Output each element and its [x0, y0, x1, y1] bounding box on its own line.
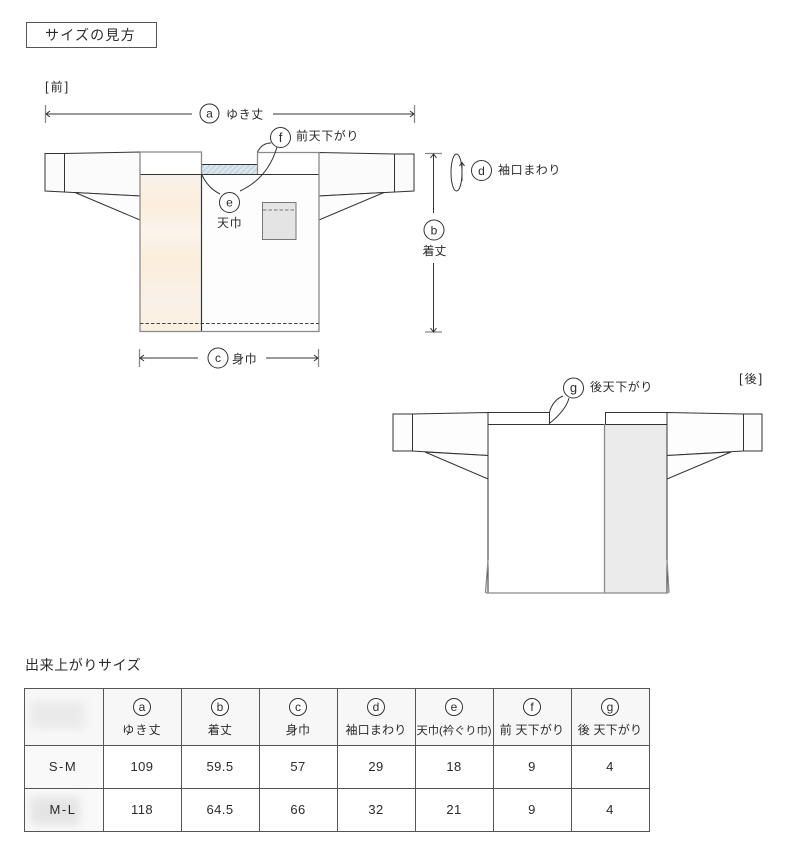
header row: 前 天下がり	[500, 722, 564, 737]
row S-M: 4	[606, 759, 614, 774]
table heading: 出来上がりサイズ	[25, 657, 141, 673]
callout g: back neck drop: g	[570, 380, 577, 395]
dimension d: cuff circumference: 袖口まわり	[498, 163, 561, 177]
row M-L: 21	[446, 802, 462, 817]
title box: サイズの見方: サイズの見方	[45, 27, 136, 43]
header row	[122, 698, 642, 737]
header row: g	[607, 700, 613, 714]
header row: c	[295, 700, 301, 714]
row S-M: 29	[368, 759, 384, 774]
header row: 袖口まわり	[345, 723, 407, 737]
row M-L: 64.5	[207, 802, 233, 817]
label: front view: [前]	[45, 79, 68, 94]
dimension d: cuff circumference: d	[478, 164, 485, 178]
dimension d: cuff circumference	[451, 154, 561, 191]
front body	[140, 152, 319, 332]
row M-L	[50, 802, 614, 817]
callout f: front neck drop	[240, 128, 359, 191]
callout f: front neck drop: f	[279, 130, 283, 145]
dimension b: length: b	[431, 224, 438, 238]
front pocket	[262, 202, 296, 240]
row S-M: 18	[446, 759, 462, 774]
row M-L: 118	[131, 802, 153, 817]
dimension b: length: 着丈	[422, 243, 447, 258]
callout e: neck width: 天巾	[217, 216, 242, 230]
row M-L: 9	[528, 802, 536, 817]
dimension a: sleeve span	[46, 104, 414, 123]
dimension b: length	[422, 154, 447, 332]
left sleeve of front	[45, 152, 140, 220]
header row: d	[373, 700, 379, 714]
back garment diagram	[393, 412, 762, 593]
header row: e	[451, 700, 458, 714]
row M-L: 32	[368, 802, 384, 817]
row S-M: 59.5	[207, 759, 233, 774]
size table	[24, 688, 650, 832]
header row: a	[139, 700, 146, 714]
header row: 身巾	[286, 722, 310, 737]
header row: f	[530, 700, 534, 714]
header row: ゆき丈	[122, 723, 162, 737]
header row: b	[217, 700, 224, 714]
front garment diagram	[45, 152, 414, 332]
callout e: neck width: e	[226, 196, 233, 210]
right sleeve of front	[319, 152, 414, 220]
title box: サイズの見方	[26, 22, 156, 48]
right sleeve of back	[667, 412, 762, 479]
row S-M: S-M	[49, 759, 77, 774]
header row: 天巾(衿ぐり巾)	[416, 723, 492, 737]
header row: 後 天下がり	[578, 722, 642, 737]
row S-M	[49, 759, 614, 774]
header row: 着丈	[208, 722, 232, 737]
callout f: front neck drop: 前天下がり	[296, 128, 359, 143]
callout e: neck width	[202, 175, 242, 230]
row M-L: 4	[606, 802, 614, 817]
row M-L: M-L	[50, 802, 76, 817]
row M-L: 66	[290, 802, 306, 817]
row S-M: 9	[528, 759, 536, 774]
label: back view: [後]	[739, 371, 762, 386]
back body	[486, 412, 669, 593]
dimension a: sleeve span: ゆき丈	[226, 108, 264, 122]
table scan shading	[24, 688, 650, 831]
left sleeve of back	[393, 412, 488, 479]
row S-M: 57	[290, 759, 306, 774]
dimension a: sleeve span: a	[206, 106, 213, 120]
row S-M: 109	[131, 759, 153, 774]
dimension c: body width: c	[215, 351, 221, 365]
table grid	[24, 688, 650, 832]
callout g: back neck drop: 後天下がり	[590, 379, 653, 394]
dimension c: body width	[140, 348, 318, 368]
callout g: back neck drop	[550, 378, 653, 423]
dimension c: body width: 身巾	[232, 351, 257, 366]
